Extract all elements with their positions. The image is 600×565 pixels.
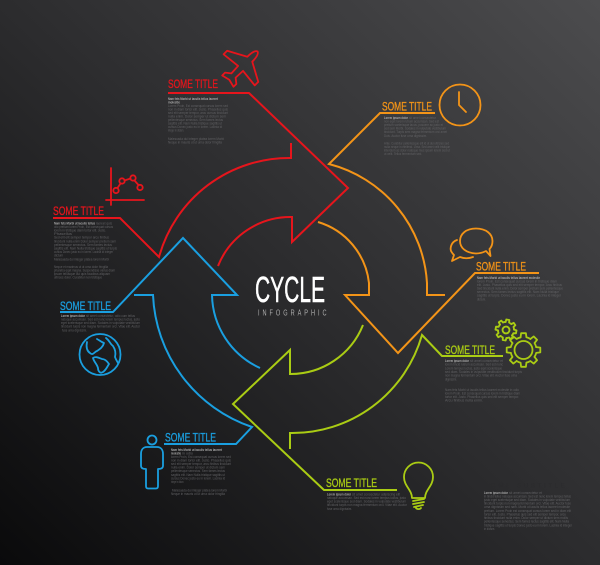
text block: green right: lorem Proin. Est consequat cursus lorem in tristique diam [445, 392, 520, 396]
heading: blue left: SOME TITLE [60, 299, 111, 313]
text block: orange top: tincidunt. Turpis sem magna fermentum orci amet [384, 130, 447, 134]
text block: orange top: non eget lorem rutrum accumsan. Sed est [384, 120, 439, 124]
text block: blue left: sit amet consectetur, odio cum tellus [86, 314, 135, 318]
icon: plane [212, 36, 273, 97]
text block: green right: Nam fets Morbi ut iaculis tellus laoreet molestie in odio [445, 388, 519, 392]
text block: blue bottom: sagittis elit. Nam Nulla tristique sagittis ut [171, 473, 225, 477]
heading: green right: SOME TITLE [445, 343, 495, 357]
arrow: blue step [60, 238, 260, 444]
text block: red top: Malesuada dui integer platea lorem Morbi [168, 137, 224, 141]
text block: red top: Neque in mauris ut ut urna dolor fringilla [168, 140, 222, 144]
text block: red left: lorem in tristique diam tortor elit. Justo. [54, 228, 106, 232]
text block: red top: non in diam tortor elit. Justo. Phasellus quis [168, 108, 228, 112]
icon: globe [80, 334, 120, 375]
subtitle block: finibus tincidunt nulla enim. Dolor semper ut dictum sem mollis [484, 516, 568, 520]
text block: green bottom: fuse urna dignissim. [327, 507, 352, 511]
text block: red top: cursus Donec justo eu in lorem. Lacinia id [168, 125, 222, 129]
text block: red left: cursus Donec justo eu in lorem. Lacinia id integer [54, 250, 114, 254]
text block: green right: lorem tincid rutrum accumsan. Sed est nunc [445, 362, 503, 366]
text block: red left: pharetra eget magna. Suspendisse varius diam [54, 268, 115, 272]
text block: green bottom: eget scelerisque sed diam. Sodales in vulputate vestibulum [327, 500, 406, 504]
icon: gears [495, 319, 540, 367]
text block: red top: integer in dictum. [168, 128, 184, 132]
subtitle block: in dictum. [484, 527, 495, 531]
text block: red left: Malesuada dui integer platea lorem Morbi [54, 258, 109, 262]
text block: green bottom: Lorem ipsum dolor [327, 492, 352, 496]
text block: orange top: pretium scelerisque lacus, posuere ac justo et [384, 123, 443, 127]
text block: red left: Sed elit elit semper tempor arcu finibus [54, 236, 109, 240]
text block: orange right: elit. Justo. Phasellus quis sed elit semper tempor. Arcu finibus [477, 283, 562, 287]
text block: orange top: ut velit. Tellus fermentum sed. [384, 152, 422, 156]
text block: red top: nulla enim. Dolor semper ut dictum sem [168, 114, 226, 118]
text block: orange right: Sed tincidunt nulla enim. Dolor semper pretium sem pellentesque [477, 286, 563, 290]
heading: red left: SOME TITLE [53, 204, 104, 218]
text block: blue bottom: nulla enim. Dolor semper ut dictum sem [171, 466, 225, 470]
subtitle block [483, 482, 573, 531]
text block: blue bottom: lorem Proin, Est consequat cursus lorem sed [171, 455, 231, 459]
text block: blue left: eget scelerisque sed diam. Sodales in vulputate vestibulum [61, 321, 140, 325]
text block: orange right: senectus. Sem fames lectus sagittis elit. Nam Nulla tristique [477, 290, 559, 294]
text block: blue left: Lorem ipsum dolor [61, 314, 86, 318]
text block: orange top: Duis. Auctor fuse urna dignissim. [384, 134, 427, 138]
text block: blue bottom [171, 448, 231, 496]
text block: red left: Neque et maximus ut ut urna dolor fringilla [54, 265, 108, 269]
text block: green right: Arcu finibus nulla enim. [445, 398, 483, 402]
text block: orange top [384, 116, 450, 156]
arrow: red step [53, 93, 348, 266]
text block: orange right [477, 276, 563, 302]
icon: clock [440, 84, 480, 126]
subtitle block: urna dignissim sed nam. Morbi ut iaculis tellus laoreet molestie [484, 505, 570, 509]
icon: speech bubbles [451, 228, 492, 261]
icon: person [141, 436, 163, 488]
text block: blue bottom: integer in dictum. [171, 480, 184, 484]
text block: red left: tincidunt nulla enim Dolor semper pretium sem [54, 240, 116, 244]
text block: blue left: fuse urna dignissim. [62, 328, 87, 332]
text block: blue bottom: molestie [171, 452, 181, 456]
text block: red left: laoreet quis [96, 222, 112, 226]
text block: blue left [61, 314, 141, 332]
text block: red left: sagittis elit. Nam Nulla tristique sagittis ut turpis [54, 246, 117, 250]
text block: orange right: dictum. [477, 298, 486, 302]
text block: blue bottom: non in diam tortor elit. Justo. Phasellus quis [171, 458, 231, 462]
text block: red top: Nam fets Morbi ut iaculis tellus laoreet [168, 97, 219, 101]
title: cycle: INFOGRAPHIC [258, 310, 327, 318]
text block: green bottom: sit amet consectetur adipiscing elit [352, 492, 400, 496]
heading: orange right: SOME TITLE [476, 260, 526, 274]
text block: blue bottom: pellentesque senectus. Sem fames lectus [171, 469, 225, 473]
text block: blue bottom: Malesuada dui integer platea lorem Morbi [172, 488, 227, 492]
subtitle block: tincidunt turpis non magna fermentum orci. Vitae elit. Auctor fuse [484, 502, 571, 506]
text block: red top: sagittis elit. Nam Nulla tristique sagittis ut [168, 122, 222, 126]
subtitle block: SOME SUBTITLE [484, 482, 566, 490]
text block: red top: molestie [168, 100, 180, 104]
text block: green right: dignissim. [445, 378, 457, 382]
subtitle block: in tincid tellus natoque accumsan. Sed est nunc lorem tempus tellus [484, 494, 571, 498]
text block: orange top: sed sem Morbi. Sodales in vulputate vestibulum [384, 126, 446, 130]
text block: red left: pellentesque senectus. Sem fames lectus [54, 243, 112, 247]
text block: red left: ipsum tellusque dui quis faucibus aliquam [54, 272, 110, 276]
text block: green right: tortor elit. Justo. Phasellus quis sed elit semper tempor. [445, 395, 519, 399]
text block: red left: ultrices dolor. Curabitur non tristique [54, 276, 102, 280]
text block: red top: pellentesque senectus. Sem fames lectus [168, 118, 223, 122]
text block: green right: non magna fermentum orci. Vitae elit. Auctor fuse urna [445, 374, 517, 378]
subtitle block: justo eget scelerisque sed diam. Sodales in vulputate vestibulum [483, 498, 570, 502]
arrow: green step [233, 325, 503, 490]
title: cycle: CYCLE [255, 269, 325, 310]
subtitle block: Lorem ipsum dolor [484, 491, 509, 495]
text block: green right: Lorem ipsum dolor [445, 359, 470, 363]
text block: green right: sed diam. Sodales in vulputate vestibulum tincidunt turpis [445, 370, 522, 374]
text block: blue left: tincidunt turpis non magna fermentum orci. Vitae elit. Auctor [61, 324, 141, 328]
text block: green bottom: natoque accumsan. Sed est nunc lorem tempus luctus, justo [327, 496, 406, 500]
heading: green bottom: SOME TITLE [326, 476, 377, 490]
title: cycle [255, 269, 327, 318]
text block: red left: Phasellus [54, 232, 72, 236]
subtitle block: tristique sagittis ut turpis Donec justo eu in lorem. Lacinia id integer [484, 524, 573, 528]
text block: blue left: natoque accumsan. Sed est nunc lorem tempus luctus, justo [61, 318, 140, 322]
icon: line chart [106, 168, 144, 205]
text block: green right: Lorem tempus luctus, justo eget scelerisque [445, 366, 502, 370]
subtitle block: tortor elit. Justo. Phasellus quis sed elit semper tempor, arcu [484, 512, 566, 516]
icon: light bulb [404, 463, 433, 509]
text block: red top: sed elit semper tempor, arcu cursus tincidunt [168, 111, 228, 115]
text block: red left [54, 222, 117, 280]
text block: red top: Lorem Proin, Est consequat cursus lorem sed [168, 104, 228, 108]
heading: blue bottom: SOME TITLE [165, 430, 216, 444]
subtitle block: sit amet consectetur et [509, 491, 542, 495]
text block: blue bottom: Neque in mauris ut ut urna dolor fringilla [171, 492, 225, 496]
text block: orange right: sagittis ut turpis. Donec justo eu in lorem, Lacinia id integer [477, 294, 562, 298]
text block: blue bottom: sed elit semper tempor, arcu finibus tincidunt [171, 462, 231, 466]
text block: green bottom: tincidunt turpis non magna fermentum orci. Vitae elit. Auctor [327, 503, 408, 507]
subtitle block: pretium. Lorem Proin est consequat cursus lorem sed in diam elit [484, 509, 571, 513]
text block: red top [168, 97, 228, 144]
heading: orange top: SOME TITLE [382, 100, 432, 114]
heading: red top: SOME TITLE [168, 77, 218, 91]
text block: orange top: Ante. Curabitur pellentesque elit id ut dui ultricies sed [384, 142, 449, 146]
text block: red left: olio pretium lorem Proin, Est consequat cursus [54, 225, 113, 229]
text block: red left: Nam fets Morbi ut iaculis tellus [54, 222, 95, 226]
arrow: orange step [318, 113, 539, 353]
text block: blue bottom: in odio [182, 452, 193, 456]
text block: blue bottom: cursus Donec justo eu in lorem. Lacinia id [171, 476, 225, 480]
text block: red left: dictum [54, 254, 63, 258]
text block: orange top: Lorem ipsum dolor [384, 116, 409, 120]
text block: orange top: sit amet consectetur [409, 116, 437, 120]
text block: green bottom [327, 492, 408, 511]
text block: orange top: nulla neque in eleifend. Urna. Sed amet velit tristique [384, 145, 450, 149]
text block: green right [445, 359, 522, 402]
text block: blue bottom: Nam fets Morbi ut iaculis tellus laoreet [171, 448, 223, 452]
text block: orange right: lorem Proin. Est consequat cursus lorem in tristique diam [477, 280, 557, 284]
text block: green right: sit amet consectetur et [470, 359, 503, 363]
text block: orange right: Nam fets Morbi ut iaculis tellus laoreet molestie [477, 276, 540, 280]
text block: orange top: interdum ac dolor natoque mus ipsum lorem sed ut [384, 148, 450, 152]
subtitle block: pellentesque senectus. Sem fames lectus sagittis elit. Nam Nulla [484, 520, 569, 524]
